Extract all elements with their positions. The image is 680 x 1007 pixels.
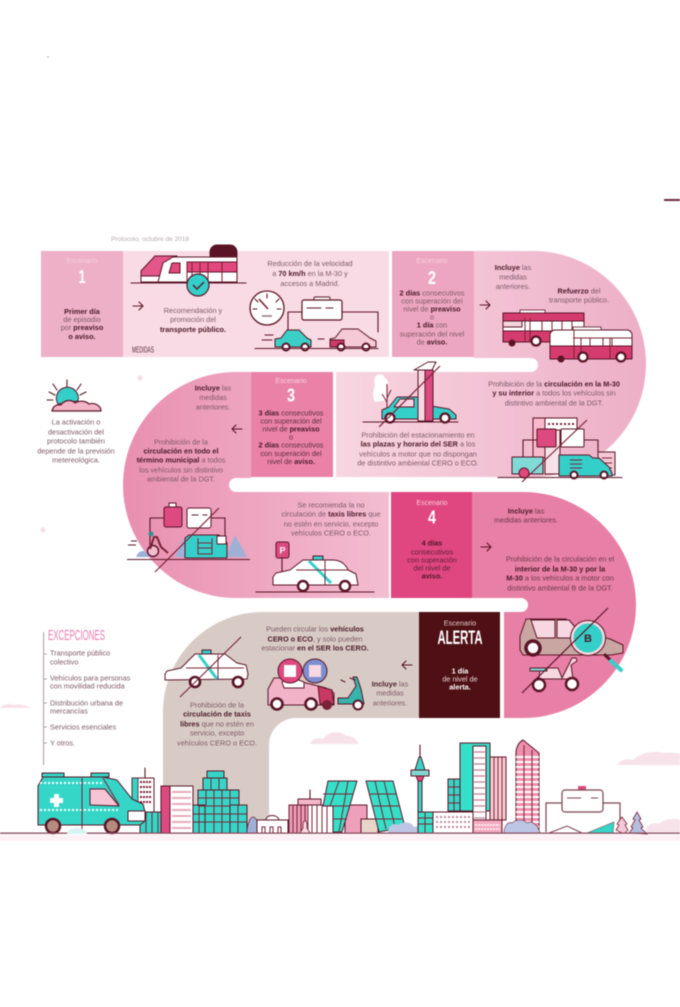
panel: alert scenario <box>419 612 500 718</box>
panel: scenario 3: 2 días consecutivos <box>259 440 324 450</box>
text: speed reduction: a 70 km/h en la M-30 y <box>272 269 348 278</box>
panel: scenario 4: consecutivos <box>411 548 453 556</box>
icon: sign and wires <box>288 297 378 332</box>
text: CERO and ECO: estacionar en el SER los CERO. <box>261 644 369 652</box>
icon: cars on road <box>255 329 378 350</box>
heading: EXCEPCIONES <box>48 628 105 644</box>
icon: train <box>131 245 246 296</box>
text: M-30 ban: y su interior a todos los vehículos sin <box>492 388 616 398</box>
panel: scenario 3: con superación del <box>260 416 322 426</box>
text: includes previous <box>494 506 558 524</box>
panel: scenario 1: por preaviso <box>61 323 104 332</box>
Torre Espacio <box>504 740 540 833</box>
icon: car and scooter with B label: B <box>584 633 592 645</box>
panel: scenario 1: Escenario <box>66 258 98 265</box>
panel: scenario 2: 2 días consecutivos <box>400 288 465 298</box>
text: includes previous: medidas anteriores. <box>494 516 558 524</box>
text: free taxi ban <box>177 700 257 748</box>
text: taxi recommendation <box>282 500 380 538</box>
panel: scenario 3: Escenario <box>275 378 307 385</box>
panel: scenario 2: de aviso. <box>417 338 447 346</box>
panel: scenario 1: Primer día <box>64 307 101 316</box>
panel: scenario 1 measures <box>123 245 389 357</box>
text: free taxi ban: servicio, excepto <box>190 728 244 738</box>
text: CERO and ECO: CERO o ECO, y solo pueden <box>268 634 362 644</box>
text: includes previous: medidas <box>199 393 227 402</box>
text: parking ban <box>357 430 479 468</box>
text: inner M-30 ban: M-30 a los vehículos a motor con <box>506 574 614 582</box>
text: transport reinforcement: transporte público. <box>549 296 609 304</box>
ground line <box>0 828 680 841</box>
icon: buses <box>503 310 632 362</box>
text: includes previous <box>495 263 532 291</box>
skyline: Madrid <box>132 740 647 834</box>
text: recommendation <box>160 306 226 334</box>
text: municipal ban: los vehículos sin distintivo <box>139 466 223 474</box>
panel: scenario 2: Escenario <box>416 258 448 265</box>
toll gantry and station <box>546 786 647 834</box>
panel: exceptions list: Vehículos para personas <box>50 674 131 682</box>
text: includes previous: medidas <box>376 688 404 698</box>
panel: scenario 2: 1 día con <box>417 320 447 330</box>
panel: exceptions list: Y otros. <box>50 738 75 748</box>
panel: alert measures ribbon <box>163 612 419 832</box>
panel: scenario 4: Escenario <box>416 500 448 507</box>
text: weather note: desactivación del <box>48 428 104 436</box>
text: transport reinforcement <box>549 286 609 304</box>
icon: city traffic ban <box>498 418 622 482</box>
panel: scenario 3: nivel de aviso. <box>267 457 315 466</box>
text: free taxi ban: circulación de taxis <box>183 710 251 718</box>
arrow <box>232 425 242 433</box>
Kio towers <box>323 781 426 833</box>
text: inner M-30 ban: interior de la M-30 y por la <box>515 564 606 574</box>
text: taxi recommendation: vehículos CERO o ECO. <box>291 528 371 538</box>
text: inner M-30 ban: distintivo ambiental B de la DGT. <box>507 584 613 592</box>
arrow <box>480 301 490 309</box>
text: municipal ban: Prohibición de la <box>154 438 209 446</box>
panel: exceptions list: Transporte público <box>50 648 110 658</box>
text: M-30 ban: Prohibición de la circulación en la M-30 <box>488 380 620 388</box>
text: speed reduction: accesos a Madrid. <box>280 279 340 288</box>
text: includes previous: Incluye las <box>508 506 545 516</box>
building with antenna <box>132 768 170 833</box>
panel: scenario 4: 4 días <box>422 538 442 548</box>
panel: alert scenario: de nivel de <box>442 674 478 684</box>
text: speed reduction: Reducción de la velocidad <box>267 259 353 268</box>
white office block <box>433 812 473 833</box>
panel: scenario 4: aviso. <box>422 572 442 580</box>
panel: scenario 2 <box>392 251 474 357</box>
panel: exceptions list: Servicios esenciales <box>50 722 116 732</box>
top corner mark <box>664 199 680 201</box>
text: free taxi ban: vehículos CERO o ECO. <box>177 738 257 748</box>
panel: exceptions list <box>43 628 131 765</box>
panel: alert scenario: 1 día <box>452 666 469 676</box>
text: includes previous: Incluye las <box>495 263 532 272</box>
panel: alert scenario: alerta. <box>449 682 471 692</box>
panel: exceptions list: Distribución urbana de <box>50 698 123 708</box>
text: weather note: depende de la previsión <box>37 446 115 456</box>
panel: scenario 3: 3 días consecutivos <box>259 408 324 418</box>
panel: scenario 4: del nivel de <box>414 564 450 572</box>
panel: scenario 3: 3 <box>287 386 295 406</box>
text: includes previous <box>372 680 409 708</box>
decorative specks <box>40 56 142 532</box>
text: recommendation: promoción del <box>170 315 216 324</box>
text: includes previous: anteriores. <box>496 282 530 291</box>
text: municipal ban <box>137 438 226 484</box>
panel: scenario 4: 4 <box>428 508 436 528</box>
text: weather note: metereológica. <box>52 456 100 464</box>
panel: alert scenario: ALERTA <box>438 627 482 649</box>
text: free taxi ban: libres que no estén en <box>180 720 254 728</box>
icon: ambulance <box>38 773 146 833</box>
panel: scenario 1: 1 <box>78 267 86 287</box>
text: taxi recommendation: circulación de taxis libres que <box>282 510 380 518</box>
panel: scenario 2: nivel de preaviso <box>403 304 461 314</box>
panel: exceptions list: con movilidad reducida <box>50 682 126 690</box>
panel: scenario 3 <box>251 372 333 477</box>
icon: speedometer <box>250 291 284 325</box>
icon: municipal traffic ban <box>127 503 250 572</box>
text: speed reduction <box>267 259 353 288</box>
trees and small palace <box>247 790 333 833</box>
arrow <box>402 661 412 669</box>
text: inner M-30 ban <box>506 554 615 592</box>
text: municipal ban: término municipal a todos <box>137 456 226 464</box>
panel: scenario 1 <box>41 251 123 357</box>
panel: exceptions list: colectivo <box>50 658 78 666</box>
text: municipal ban: ambiental de la DGT. <box>147 474 215 484</box>
arrow <box>481 543 491 551</box>
panel: scenario 4 <box>391 492 472 598</box>
panel: scenario 3 measures ribbon <box>123 372 389 598</box>
text: weather note: La activación o <box>52 418 100 426</box>
text: M-30 ban: distintivo ambiental de la DGT. <box>505 398 603 408</box>
panel: alert scenario: Escenario <box>444 618 476 628</box>
icon: taxi at parking <box>256 542 374 592</box>
teal tower <box>193 771 247 833</box>
Torre de Cristal group <box>448 743 506 833</box>
text: weather note: protocolo también <box>47 436 105 446</box>
pink and white tower <box>161 786 193 833</box>
panel: scenario 3: con superación del <box>260 449 322 458</box>
icon: crossed out taxi <box>165 637 248 697</box>
panel: scenario 4 measures ribbon <box>472 492 636 718</box>
panel: scenario 1: de episodio <box>63 315 101 324</box>
panel: scenario 4: con superación <box>407 556 457 564</box>
text: parking ban: vehículos a motor que no dispongan <box>359 450 477 458</box>
text: CERO and ECO: Pueden circular los vehículos <box>266 624 364 634</box>
text: parking ban: Prohibición del estacionamiento en <box>361 430 475 440</box>
text: recommendation: transporte público. <box>160 325 226 334</box>
text: M-30 ban <box>488 380 620 408</box>
panel: scenario 2: con superación del <box>401 296 463 306</box>
panel: scenario 3: nivel de preaviso <box>262 424 320 434</box>
text: transport reinforcement: Refuerzo del <box>558 286 601 296</box>
panel: scenario 3: o <box>289 432 293 442</box>
text: free taxi ban: Prohibición de la <box>190 700 245 710</box>
Torrespaña tower <box>411 745 433 833</box>
text: CERO and ECO <box>261 624 369 652</box>
icon: car and scooter with B label <box>520 608 623 693</box>
icon: taxi at parking: P <box>279 546 286 556</box>
text: includes previous: Incluye las <box>372 680 409 688</box>
text: taxi recommendation: no estén en servicio, excepto <box>284 520 378 528</box>
icon: sun and cloud <box>47 380 101 411</box>
text: municipal ban: circulación en todo el <box>143 446 219 456</box>
text: parking ban: las plazas y horario del SER a los <box>361 440 476 448</box>
panel: exceptions list: mercancías <box>50 706 88 716</box>
text: includes previous <box>195 384 232 412</box>
panel: scenario 2: 2 <box>428 268 436 288</box>
panel: scenario 2 measures ribbon <box>336 251 646 477</box>
text: recommendation: Recomendación y <box>164 306 223 315</box>
text: includes previous: anteriores. <box>373 698 407 708</box>
text: includes previous: medidas <box>499 272 527 282</box>
panel: scenario 2: o <box>430 312 434 322</box>
text: taxi recommendation: Se recomienda la no <box>298 500 364 510</box>
text: weather note <box>37 418 115 464</box>
text: parking ban: de distintivo ambiental CERO o ECO. <box>357 458 479 468</box>
text: includes previous: anteriores. <box>196 402 230 412</box>
icon: CERO ECO car and scooter <box>268 659 364 710</box>
faint subtitle: Protocolo, octubre de 2018 <box>111 236 189 243</box>
icon: parking ban <box>363 362 458 427</box>
label: medidas: MEDIDAS <box>132 346 154 354</box>
panel: scenario 1: o aviso. <box>68 332 96 341</box>
text: includes previous: Incluye las <box>195 384 232 392</box>
text: inner M-30 ban: Prohibición de la circulación en el <box>506 554 615 564</box>
arrow <box>133 302 143 310</box>
panel: scenario 2: superación del nivel <box>400 330 465 338</box>
decorative clouds <box>0 704 680 832</box>
